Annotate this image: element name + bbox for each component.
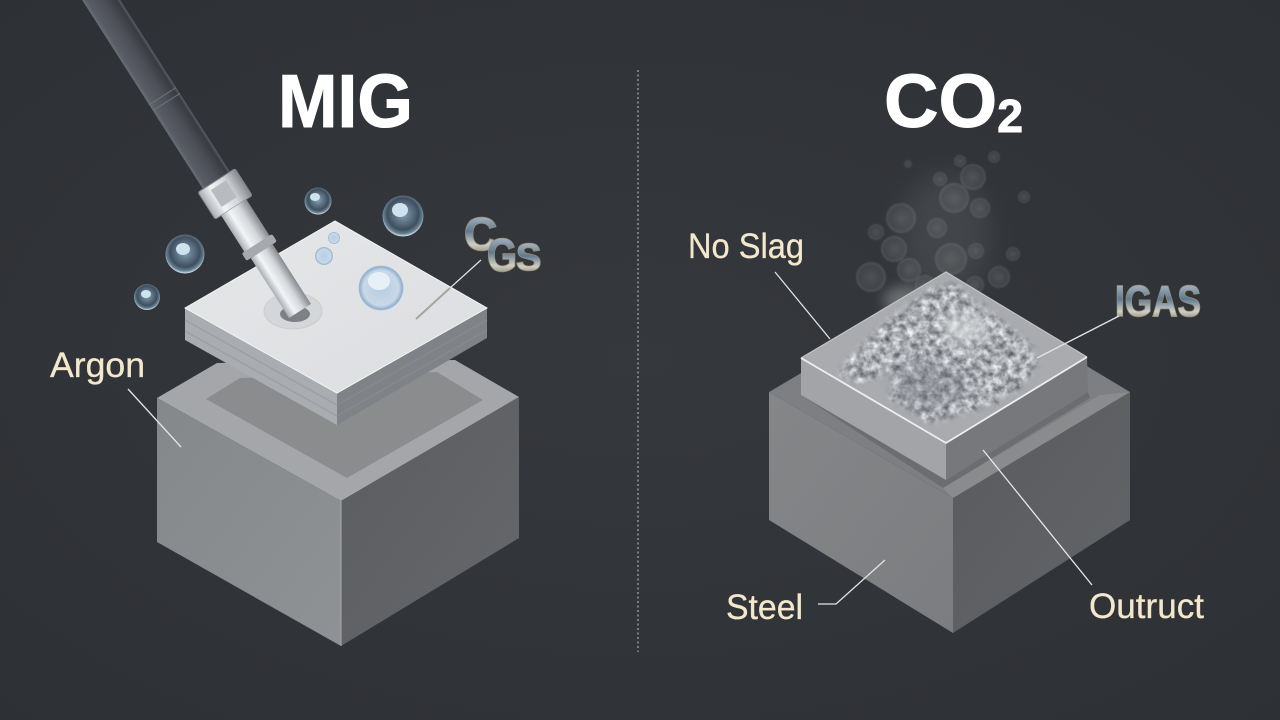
torch nozzle (221, 199, 271, 253)
heading: MIG: MIG (278, 59, 413, 143)
label: No Slag: No Slag (688, 227, 804, 266)
weld pool (264, 293, 322, 329)
divider (637, 70, 639, 652)
right panel: CO2 (688, 59, 1204, 633)
heading: CO2: 2 (997, 90, 1023, 142)
contact tip (251, 244, 311, 318)
label: metallic CGS: G (487, 229, 517, 281)
icon: welding torch (1, 0, 319, 323)
label: Outruct: Outruct (1089, 587, 1204, 626)
top plate: CO2 (801, 272, 1090, 488)
label: metallic CGS: C (464, 208, 497, 260)
label: metallic IGAS (1037, 277, 1201, 358)
left panel: MIG (1, 0, 541, 646)
label: metallic IGAS: IGAS (1115, 277, 1201, 326)
label: Steel: Steel (726, 588, 803, 627)
label: Argon: Argon (50, 346, 145, 385)
label: metallic CGS: S (516, 237, 541, 279)
label: metallic CGS (416, 208, 541, 319)
torch collar (198, 169, 252, 219)
smoke cloud (856, 151, 1030, 314)
steel block: CO2 (769, 356, 1130, 633)
torch tube (6, 0, 232, 192)
plate outline (801, 272, 1087, 443)
bubbles: argon gas (134, 188, 424, 310)
slag texture (837, 283, 1037, 423)
heading: CO2: CO (884, 59, 996, 143)
top plate: MIG (185, 221, 487, 425)
label: Steel (726, 560, 885, 627)
torch flange (242, 234, 277, 261)
steel block: MIG (157, 360, 519, 646)
label: No Slag (688, 227, 830, 339)
label: Argon (50, 346, 181, 447)
label: Outruct (983, 450, 1204, 626)
